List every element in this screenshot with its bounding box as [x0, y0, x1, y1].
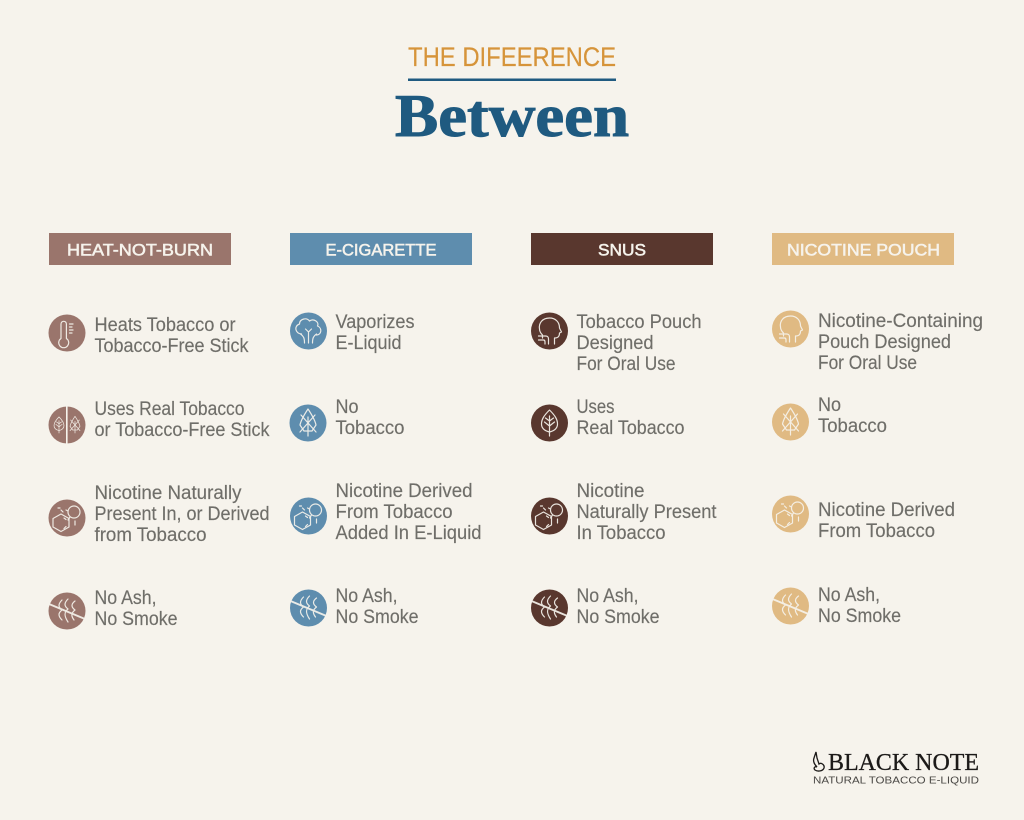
row: no ash: No Ash, — [576, 586, 638, 607]
row: nicotine derived: From Tobacco — [336, 502, 452, 523]
row: uses real tobacco: or Tobacco-Free Stick — [94, 420, 270, 441]
row: no ash — [290, 586, 418, 628]
row: nicotine derived: Added In E-Liquid — [336, 523, 482, 544]
row: no tobacco: Tobacco — [818, 416, 887, 437]
heading: heat-not-burn: HEAT-NOT-BURN — [67, 240, 213, 260]
row: uses real tobacco — [531, 397, 684, 442]
row: no tobacco: No — [336, 397, 358, 418]
logo: black note — [813, 750, 979, 786]
row: nicotine — [531, 481, 717, 544]
row: nicotine derived — [290, 481, 482, 544]
row: no ash: No Smoke — [94, 609, 178, 630]
row: nicotine: In Tobacco — [576, 523, 666, 544]
row: nicotine-containing pouch: Pouch Designed — [818, 332, 951, 353]
row: no ash: No Ash, — [818, 585, 880, 606]
panel: snus — [531, 233, 717, 628]
row: no ash — [772, 585, 901, 627]
row: nicotine: Nicotine — [576, 481, 644, 502]
row: no tobacco: Tobacco — [336, 418, 404, 439]
row: no tobacco: No — [818, 395, 841, 416]
heading: heat-not-burn — [49, 233, 231, 265]
row: tobacco pouch: Designed — [576, 333, 654, 354]
row: no tobacco — [772, 395, 887, 440]
row: uses real tobacco: Real Tobacco — [576, 418, 684, 439]
row: nicotine-containing pouch: Nicotine-Containing — [818, 311, 983, 332]
title: between: Between — [395, 83, 629, 149]
row: tobacco pouch: For Oral Use — [576, 354, 676, 375]
row: nicotine derived: From Tobacco — [818, 521, 935, 542]
row: uses real tobacco: Uses — [576, 397, 614, 418]
row: heats tobacco: Tobacco-Free Stick — [94, 336, 249, 357]
row: nicotine: from Tobacco — [94, 525, 206, 546]
row: uses real tobacco — [48, 399, 270, 445]
row: heats tobacco: Heats Tobacco or — [94, 315, 236, 336]
row: tobacco pouch — [531, 312, 702, 375]
row: no tobacco — [290, 397, 404, 442]
panel: heat-not-burn — [48, 233, 270, 630]
row: no ash — [531, 586, 660, 628]
panel: e-cigarette — [290, 233, 482, 628]
row: nicotine derived: Nicotine Derived — [336, 481, 472, 502]
title: the difference: THE DIFEERENCE — [408, 42, 616, 72]
icon: musical note — [814, 752, 824, 771]
row: no ash: No Smoke — [818, 606, 901, 627]
row: nicotine derived — [772, 496, 955, 542]
heading: e-cigarette: E-CIGARETTE — [326, 240, 436, 260]
row: no ash: No Ash, — [336, 586, 398, 607]
row: vaporizes: Vaporizes — [336, 312, 414, 333]
row: nicotine: Present In, or Derived — [94, 504, 270, 525]
row: nicotine derived: Nicotine Derived — [818, 500, 955, 521]
row: heats tobacco — [48, 314, 249, 357]
heading: e-cigarette — [290, 233, 472, 265]
row: tobacco pouch: Tobacco Pouch — [576, 312, 702, 333]
row: vaporizes — [290, 312, 414, 354]
row: no ash: No Ash, — [94, 588, 156, 609]
heading: snus — [531, 233, 713, 265]
title underline — [408, 78, 616, 81]
heading: nicotine pouch — [772, 233, 954, 265]
row: nicotine-containing pouch — [772, 310, 983, 374]
heading: nicotine pouch: NICOTINE POUCH — [787, 240, 940, 260]
row: nicotine — [48, 483, 270, 546]
row: nicotine: Naturally Present — [576, 502, 717, 523]
row: no ash: No Smoke — [336, 607, 418, 628]
row: nicotine-containing pouch: For Oral Use — [818, 353, 917, 374]
row: vaporizes: E-Liquid — [336, 333, 402, 354]
panel: nicotine pouch — [772, 233, 983, 627]
row: no ash — [48, 588, 178, 630]
logo wordmark: BLACK NOTE — [828, 750, 979, 776]
logo tagline: NATURAL TOBACCO E-LIQUID — [813, 774, 979, 786]
row: no ash: No Smoke — [576, 607, 660, 628]
row: uses real tobacco: Uses Real Tobacco — [94, 399, 244, 420]
row: nicotine: Nicotine Naturally — [94, 483, 242, 504]
heading: snus: SNUS — [598, 240, 646, 260]
title block — [395, 42, 629, 149]
